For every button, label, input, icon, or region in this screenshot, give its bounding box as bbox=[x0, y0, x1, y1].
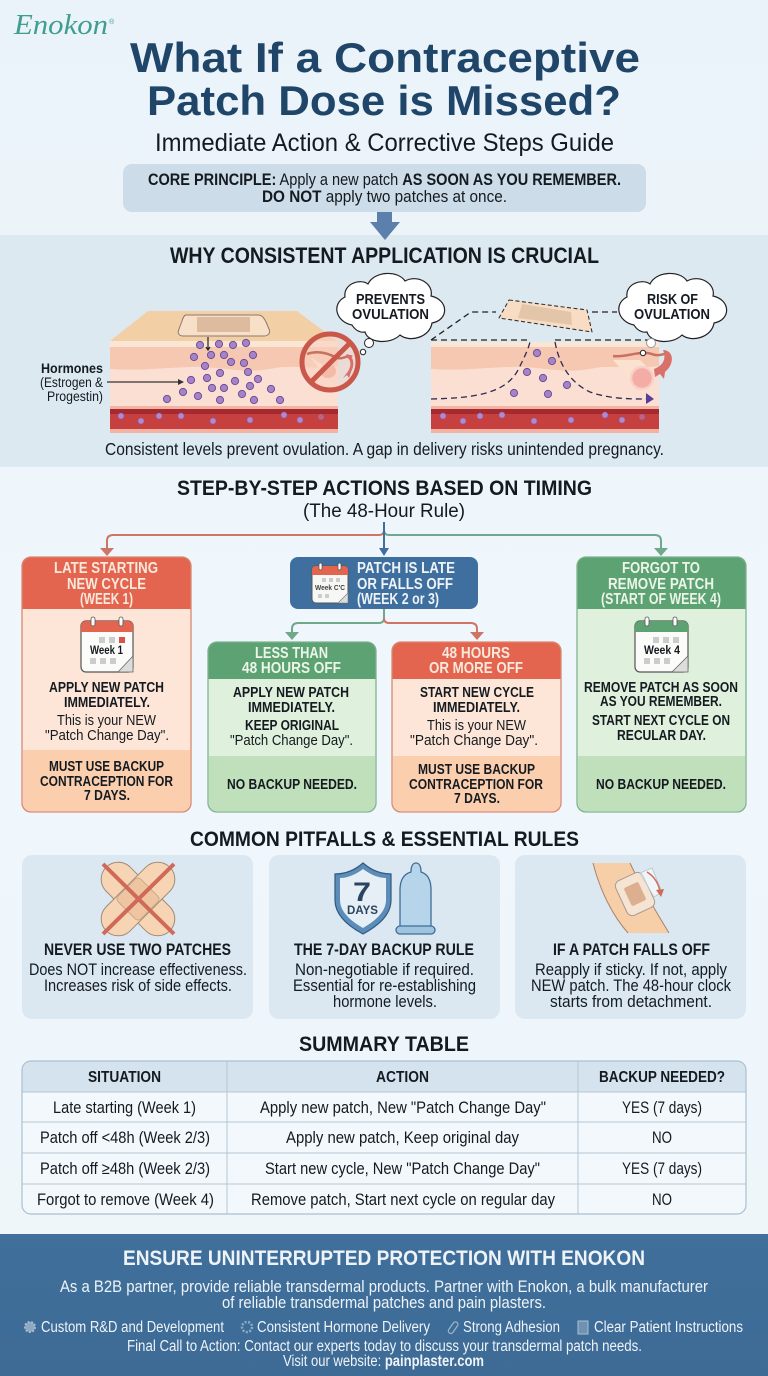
panel: patch is late or falls off: OR FALLS OFF bbox=[357, 576, 453, 593]
panel: late starting new cycle: IMMEDIATELY. bbox=[64, 695, 150, 711]
row: forgot to remove: Remove patch, Start next cycle on regular day bbox=[251, 1191, 556, 1209]
icon: calendar week 1: Week 1 bbox=[90, 643, 123, 657]
label: hormones: (Estrogen & bbox=[40, 375, 103, 390]
icon: peeling patch on arm bbox=[593, 863, 669, 933]
arrows: sub flow connectors bbox=[285, 609, 484, 640]
panel: forgot to remove patch: NO BACKUP NEEDED. bbox=[596, 777, 726, 793]
panel: the 7-day backup rule: Essential for re-establishing bbox=[293, 977, 476, 995]
heading: step-by-step: STEP-BY-STEP ACTIONS BASED ON TIMING bbox=[177, 477, 592, 500]
feature: clear instructions: Clear Patient Instructions bbox=[594, 1319, 743, 1336]
panel: forgot to remove patch: (START OF WEEK 4) bbox=[601, 591, 721, 608]
panel: late starting new cycle: LATE STARTING bbox=[54, 560, 158, 577]
arrows: top flow connectors bbox=[100, 522, 668, 556]
icon: calendar week 4: Week 4 bbox=[644, 643, 680, 657]
callout: prevents ovulation: PREVENTS bbox=[356, 291, 425, 308]
panel: 48 hours or more off: IMMEDIATELY. bbox=[433, 700, 520, 716]
caption: Consistent levels prevent ovulation. A gap in delivery risks unintended pregnancy. bbox=[105, 439, 664, 459]
panel: less than 48 hours off: KEEP ORIGINAL bbox=[245, 718, 339, 734]
panel: forgot to remove patch: REMOVE PATCH AS SOON bbox=[584, 680, 738, 696]
callout: risk of ovulation bbox=[619, 273, 727, 356]
ovary bbox=[613, 350, 672, 392]
panel: patch is late or falls off: PATCH IS LATE bbox=[357, 560, 455, 577]
panel: 48 hours or more off: "Patch Change Day". bbox=[410, 733, 538, 749]
heading: common pitfalls: COMMON PITFALLS & ESSENTIAL RULES bbox=[190, 828, 579, 851]
title: Patch Dose is Missed? bbox=[147, 77, 621, 124]
subtitle: Immediate Action & Corrective Steps Guide bbox=[155, 129, 614, 157]
row: patch off 48h or more: YES (7 days) bbox=[622, 1160, 702, 1178]
panel: less than 48 hours off: IMMEDIATELY. bbox=[248, 700, 335, 716]
core principle callout: DO NOT apply two patches at once. bbox=[262, 187, 507, 206]
label: hormones: Hormones bbox=[41, 360, 103, 376]
panel: 48 hours or more off bbox=[392, 642, 561, 812]
panel: the 7-day backup rule: THE 7-DAY BACKUP RULE bbox=[294, 940, 474, 959]
panel: the 7-day backup rule: Non-negotiable if required. bbox=[295, 961, 474, 979]
panel: less than 48 hours off: LESS THAN bbox=[255, 645, 328, 662]
icon: 7 days shield: 7 bbox=[353, 877, 371, 907]
panel: late starting new cycle: CONTRACEPTION FOR bbox=[40, 774, 173, 790]
blood vessel bbox=[110, 406, 338, 433]
panel: 48 hours or more off: 48 HOURS bbox=[442, 645, 510, 662]
detached patch bbox=[499, 300, 592, 332]
table header bbox=[88, 1069, 725, 1086]
footer paragraph: of reliable transdermal patches and pain plasters. bbox=[222, 1294, 546, 1312]
arrow: down to section bbox=[370, 212, 400, 240]
panel: the 7-day backup rule: hormone levels. bbox=[333, 993, 437, 1011]
core principle callout bbox=[123, 164, 646, 212]
panel: footer call to action bbox=[0, 1234, 768, 1376]
dashed missing-hormone lines bbox=[431, 312, 651, 340]
panel: if a patch falls off bbox=[515, 855, 746, 1019]
heading: step-by-step: (The 48-Hour Rule) bbox=[303, 501, 465, 522]
panel: late starting new cycle: 7 DAYS. bbox=[84, 788, 130, 804]
title bbox=[130, 34, 640, 124]
panel: less than 48 hours off: "Patch Change Day". bbox=[230, 733, 353, 749]
panel: forgot to remove patch: FORGOT TO bbox=[622, 560, 700, 577]
icon: condom bbox=[396, 863, 435, 934]
panel: forgot to remove patch: REMOVE PATCH bbox=[608, 576, 714, 593]
callout: prevents ovulation bbox=[337, 273, 445, 355]
row: patch off 48h or more: Start new cycle, New "Patch Change Day" bbox=[265, 1160, 540, 1178]
panel: if a patch falls off: starts from detachment. bbox=[550, 993, 712, 1011]
callout: risk of ovulation: RISK OF bbox=[647, 291, 698, 308]
diagram: skin with patch on bbox=[110, 311, 338, 433]
panel: 48 hours or more off: CONTRACEPTION FOR bbox=[409, 777, 543, 793]
row: late starting: Apply new patch, New "Patch Change Day" bbox=[260, 1099, 546, 1117]
row: patch off under 48h bbox=[40, 1129, 672, 1147]
panel: never use two patches: NEVER USE TWO PATCHES bbox=[44, 940, 231, 959]
panel: less than 48 hours off: NO BACKUP NEEDED. bbox=[227, 777, 357, 793]
feature: custom R&D: Custom R&D and Development bbox=[41, 1319, 225, 1336]
icon: 7 days shield: DAYS bbox=[347, 905, 378, 917]
row: patch off 48h or more: Patch off ≥48h (Week 2/3) bbox=[40, 1160, 210, 1178]
label: hormones bbox=[40, 360, 184, 404]
logo: Enokon bbox=[13, 10, 108, 41]
panel: why consistent application is crucial bbox=[0, 212, 768, 467]
icon: calendar week c bbox=[312, 563, 348, 603]
panel: never use two patches bbox=[22, 855, 253, 1019]
panel: forgot to remove patch: AS YOU REMEMBER. bbox=[600, 694, 722, 710]
final call to action: Visit our website: painplaster.com bbox=[283, 1353, 484, 1370]
panel: less than 48 hours off bbox=[208, 642, 376, 812]
icon: calendar week 4 bbox=[635, 617, 688, 672]
row: forgot to remove bbox=[37, 1191, 672, 1209]
panel: if a patch falls off: IF A PATCH FALLS OFF bbox=[553, 940, 710, 959]
table header: BACKUP NEEDED? bbox=[599, 1069, 725, 1086]
panel: late starting new cycle: APPLY NEW PATCH bbox=[49, 680, 164, 696]
heading: summary table: SUMMARY TABLE bbox=[299, 1033, 469, 1056]
row: patch off 48h or more bbox=[40, 1160, 702, 1178]
panel: forgot to remove patch bbox=[577, 557, 746, 812]
panel: late starting new cycle: MUST USE BACKUP bbox=[49, 759, 164, 775]
diagram: skin with patch detached bbox=[431, 300, 672, 433]
icon: calendar week c: Week C'C bbox=[315, 583, 345, 592]
footer paragraph bbox=[60, 1278, 708, 1312]
table header: SITUATION bbox=[88, 1069, 161, 1086]
row: late starting: Late starting (Week 1) bbox=[53, 1099, 196, 1117]
icon: ovulation prohibited bbox=[302, 334, 358, 390]
section heading: WHY CONSISTENT APPLICATION IS CRUCIAL bbox=[170, 243, 599, 268]
panel: forgot to remove patch: RECULAR DAY. bbox=[617, 728, 706, 744]
panel: 48 hours or more off: MUST USE BACKUP bbox=[418, 762, 535, 778]
panel: if a patch falls off: Reapply if sticky. If not, apply bbox=[535, 961, 728, 979]
title: What If a Contraceptive bbox=[130, 34, 640, 81]
hormone molecules bbox=[118, 339, 324, 424]
panel: late starting new cycle: NEW CYCLE bbox=[67, 576, 146, 593]
summary table bbox=[22, 1061, 746, 1214]
panel: late starting new cycle: This is your NEW bbox=[57, 713, 156, 729]
final call to action: Final Call to Action: Contact our experts today to discuss your transdermal patch needs. bbox=[127, 1338, 642, 1355]
heading: step-by-step bbox=[177, 477, 592, 522]
feature: consistent delivery: Consistent Hormone Delivery bbox=[257, 1319, 430, 1336]
panel: late starting new cycle: (WEEK 1) bbox=[80, 591, 133, 608]
panel: forgot to remove patch: START NEXT CYCLE ON bbox=[592, 713, 730, 729]
row: forgot to remove: NO bbox=[652, 1191, 672, 1209]
row: late starting bbox=[53, 1099, 702, 1117]
remaining molecules bbox=[440, 349, 645, 424]
arrow: hormone release bbox=[206, 337, 210, 350]
callout: risk of ovulation: OVULATION bbox=[634, 306, 710, 323]
panel: late starting new cycle bbox=[22, 557, 191, 812]
row: patch off under 48h: NO bbox=[652, 1129, 672, 1147]
icon: 7 days shield bbox=[335, 863, 391, 934]
row: late starting: YES (7 days) bbox=[622, 1099, 702, 1117]
footer heading: ENSURE UNINTERRUPTED PROTECTION WITH ENOKON bbox=[123, 1247, 645, 1270]
row: patch off under 48h: Apply new patch, Keep original day bbox=[286, 1129, 520, 1147]
callout: prevents ovulation: OVULATION bbox=[352, 306, 429, 323]
icon: calendar week 1 bbox=[81, 617, 133, 672]
panel: if a patch falls off: NEW patch. The 48-hour clock bbox=[531, 977, 732, 995]
table header: ACTION bbox=[376, 1069, 429, 1086]
icon: crossed patches bbox=[94, 855, 182, 943]
row: patch off under 48h: Patch off <48h (Week 2/3) bbox=[40, 1129, 210, 1147]
panel: the 7-day backup rule bbox=[269, 855, 500, 1019]
feature: strong adhesion: Strong Adhesion bbox=[463, 1319, 560, 1336]
panel: never use two patches: Increases risk of side effects. bbox=[44, 977, 232, 995]
panel: 48 hours or more off: START NEW CYCLE bbox=[420, 685, 534, 701]
core principle callout: CORE PRINCIPLE: Apply a new patch AS SOON AS YOU REMEMBER. bbox=[148, 170, 621, 189]
label: hormones: Progestin) bbox=[47, 389, 103, 404]
panel: patch is late or falls off bbox=[290, 557, 478, 609]
panel: 48 hours or more off: This is your NEW bbox=[427, 718, 526, 734]
logo: ® bbox=[109, 18, 115, 26]
panel: 48 hours or more off: OR MORE OFF bbox=[429, 660, 523, 677]
patch bbox=[178, 315, 270, 336]
panel: less than 48 hours off: APPLY NEW PATCH bbox=[233, 685, 349, 701]
panel: 48 hours or more off: 7 DAYS. bbox=[454, 791, 500, 807]
panel: patch is late or falls off: (WEEK 2 or 3) bbox=[357, 591, 439, 608]
final call to action bbox=[127, 1338, 642, 1370]
footer paragraph: As a B2B partner, provide reliable transdermal products. Partner with Enokon, a bulk manufacturer bbox=[60, 1278, 708, 1296]
panel: less than 48 hours off: 48 HOURS OFF bbox=[242, 660, 341, 677]
row: forgot to remove: Forgot to remove (Week 4) bbox=[37, 1191, 214, 1209]
panel: never use two patches: Does NOT increase effectiveness. bbox=[29, 961, 247, 979]
panel: late starting new cycle: "Patch Change Day". bbox=[45, 728, 169, 744]
